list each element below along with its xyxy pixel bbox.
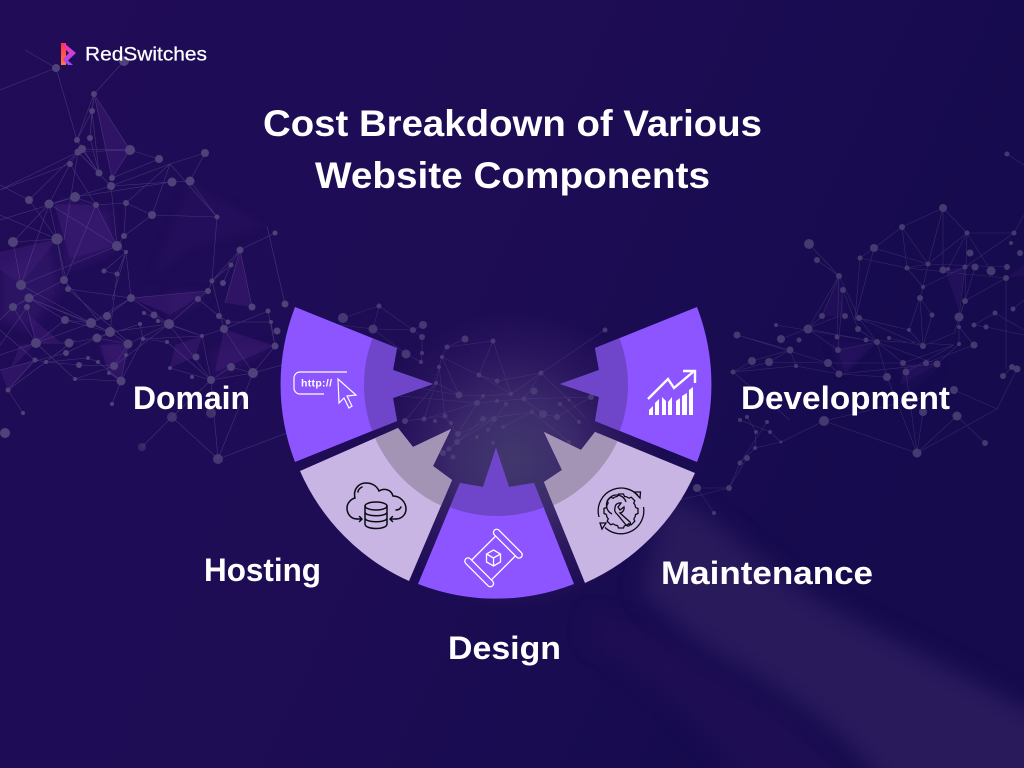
- segment: maintenance: [544, 432, 695, 583]
- title: Website Components: [315, 155, 710, 196]
- background: network triangles: [0, 94, 1024, 390]
- center glow: [365, 310, 665, 610]
- background: network nodes: [0, 56, 1023, 515]
- label: development: Development: [741, 380, 950, 416]
- background: network lines: [0, 50, 1024, 513]
- segment: design: [418, 448, 574, 599]
- label: domain: Domain: [133, 380, 250, 416]
- icon: http cursor: [294, 372, 356, 408]
- icon: http cursor: http://: [301, 378, 332, 390]
- title: [263, 103, 762, 196]
- icon: gear and wrench: [598, 488, 644, 534]
- background: blurred hand shape: [645, 504, 1024, 768]
- logo text: RedSwitches: [85, 44, 207, 66]
- segment: development: [366, 254, 711, 516]
- label: design: Design: [448, 630, 561, 666]
- background: network haze: [0, 181, 945, 395]
- title: Cost Breakdown of Various: [263, 103, 762, 144]
- logo mark: [61, 43, 76, 65]
- segment: domain: [280, 307, 433, 462]
- icon: cloud database: [347, 483, 406, 528]
- icon: growth chart: [648, 371, 695, 415]
- icon: blueprint scroll: [463, 528, 524, 588]
- label: maintenance: Maintenance: [661, 555, 873, 591]
- label: hosting: Hosting: [204, 552, 321, 588]
- logo: [61, 43, 207, 66]
- segment: hosting: [300, 428, 664, 599]
